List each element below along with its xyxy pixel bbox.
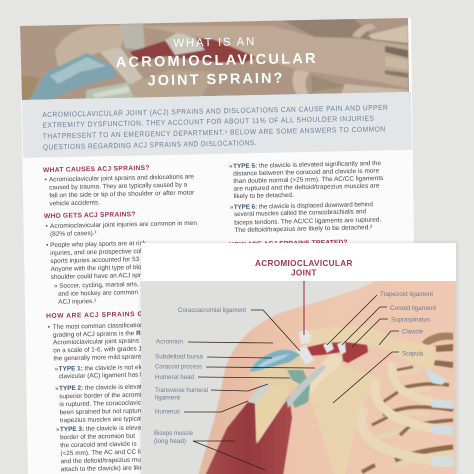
section: how graded: the generally more mild sprains	[53, 354, 142, 362]
left labels: Humeral head	[155, 374, 194, 381]
section: how graded: •	[48, 324, 50, 331]
header banner with anatomy image	[20, 18, 409, 100]
section: how graded: The most common classification	[53, 322, 144, 331]
type 6: The deltoid/trapezius are likely to be detached.²	[234, 224, 372, 234]
type 5: than double normal (>25 mm). The AC/CC ligaments	[233, 175, 383, 185]
left column text	[43, 164, 203, 474]
type 6	[230, 201, 382, 234]
bursa highlight	[258, 354, 290, 367]
cartilage	[425, 368, 447, 385]
coracoid process	[310, 354, 342, 394]
section: what causes: caused by trauma. They are typically caused by a	[49, 182, 188, 191]
right labels: Supraspinatus	[391, 316, 431, 324]
front sheet: anatomy diagram	[141, 243, 456, 474]
section: who gets: (82% of cases).¹	[50, 230, 97, 238]
type 5: distance between the coracoid and clavicle is more	[233, 168, 380, 178]
leader lines	[184, 295, 399, 470]
heading: how treated: HOW ARE ACJ SPRAINS TREATED?	[229, 239, 348, 249]
section: who gets: WHO GETS ACJ SPRAINS?	[44, 211, 136, 220]
section: how graded: Acromioclavicular joint sprains are	[53, 337, 151, 346]
section: what causes: •	[45, 176, 47, 184]
left labels: Coracoacromial ligament	[178, 307, 246, 314]
type 5: likely to be detached.	[234, 192, 294, 200]
title: WHAT IS AN	[173, 36, 256, 50]
section: what causes: Acromioclavicular joint sprains and dislocations are	[49, 173, 194, 183]
right labels: Clavicle	[402, 328, 423, 336]
type 5: »	[229, 163, 233, 170]
type 6: »	[230, 204, 234, 211]
section: who gets: •	[46, 223, 48, 230]
left labels: Transverse humeral	[155, 387, 209, 394]
scapula	[310, 362, 379, 474]
section: who gets: » Soccer, cycling, martial arts, skiing	[54, 281, 157, 290]
diagram heading: JOINT	[291, 268, 317, 278]
humerus	[255, 384, 290, 444]
title	[115, 35, 317, 90]
section: how graded: and the deltoid/trapezius muscles	[61, 456, 155, 465]
section: who gets: Acromioclavicular joint injuries are common in men	[50, 220, 197, 230]
type 5: are ruptured and the deltoid/trapezius muscles are	[233, 183, 380, 193]
subdeltoid bursa	[250, 350, 300, 372]
right labels	[380, 291, 436, 358]
section: how graded: attach to the clavicle) are likely	[61, 464, 149, 473]
section: how graded: clavicular (AC) ligament has been	[59, 371, 155, 380]
section: who gets	[44, 210, 199, 306]
left labels: Humerus	[155, 408, 181, 416]
section: how graded: »	[55, 385, 59, 392]
section: what causes	[43, 164, 195, 208]
left labels: Coracoid process	[155, 364, 203, 370]
skin silhouette	[198, 281, 456, 474]
section: how graded: border of the acromion but	[60, 433, 135, 441]
section: how graded: TYPE 1: the clavicle is not elevated	[59, 364, 160, 373]
right labels: Scapula	[402, 350, 423, 358]
section: who gets: Anyone with the right type of blow	[50, 264, 147, 273]
back ribs	[362, 367, 453, 472]
transverse humeral ligament	[248, 382, 270, 404]
biceps tendon bands	[278, 364, 326, 410]
left labels: Biceps muscle	[154, 430, 193, 437]
anatomy illustration	[141, 281, 456, 474]
section: who gets: and ice hockey are common	[58, 289, 139, 298]
section: what causes: WHAT CAUSES ACJ SPRAINS?	[43, 165, 150, 174]
biceps muscle	[205, 394, 292, 474]
section: how graded: is ruptured. The coracoclavicular	[59, 399, 153, 408]
section: how graded: »	[56, 426, 60, 433]
right labels: Conoid ligament	[390, 305, 436, 312]
sheet header	[141, 243, 456, 281]
section: who gets: shoulder could have an ACJ sprain	[51, 272, 150, 281]
section: what causes: vehicle accidents.	[49, 199, 100, 207]
intro panel	[22, 92, 412, 158]
section: how graded: HOW ARE ACJ SPRAINS GRADED?	[46, 310, 175, 320]
section: who gets: People who play sports are at risk	[50, 240, 147, 249]
section: how graded: TYPE 2: the clavicle is elevated	[59, 383, 149, 392]
section: who gets: ACJ injuries.¹	[58, 298, 96, 306]
type 6: several muscles called the coracobrachialis and	[234, 208, 367, 218]
diagram heading: ACROMIOCLAVICULAR	[255, 259, 353, 268]
section: who gets: injuries, and one prospective cohort	[50, 248, 151, 257]
intro text: ACROMIOCLAVICULAR JOINT (ACJ) SPRAINS AND DISLOCATIONS CAN CAUSE PAIN AND UPPER	[42, 103, 388, 119]
title: ACROMIOCLAVICULAR	[116, 51, 317, 71]
left labels: (long head)	[154, 438, 186, 445]
trapezoid and conoid ligaments	[296, 329, 346, 365]
illustration background	[141, 281, 198, 474]
type 5	[229, 160, 384, 200]
section: how graded: been sprained but not ruptured	[59, 407, 147, 416]
left labels	[154, 307, 246, 445]
back rib brown bands	[362, 367, 453, 472]
left labels: Subdeltoid bursa	[155, 354, 203, 360]
type 6: biceps tendons. The AC/CC ligaments are ruptured.	[234, 217, 381, 227]
intro text: EXTREMITY DYSFUNCTION. THEY ACCOUNT FOR ABOUT 11% OF ALL SHOULDER INJURIES	[42, 114, 375, 130]
section: how graded: trapezius muscles are typically	[60, 415, 147, 424]
back rib cream bodies	[372, 370, 453, 466]
red pointer	[304, 281, 305, 335]
section: how graded: »	[55, 366, 59, 373]
type 5: TYPE 5: the clavicle is elevated significantly and the	[233, 160, 382, 170]
clavicle	[296, 326, 436, 369]
front ribs	[361, 362, 453, 462]
front sheet shadow	[140, 242, 457, 474]
intro text: THATPRESENT TO AN EMERGENCY DEPARTMENT.¹ BELOW ARE SOME ANSWERS TO COMMON	[43, 124, 386, 141]
section: how graded: superior border of the acromion	[59, 391, 149, 400]
title: JOINT SPRAIN?	[147, 71, 284, 89]
humeral head	[249, 355, 306, 388]
section: how graded: TYPE 3: the clavicle is elevated	[60, 424, 150, 433]
supraspinatus muscle	[300, 342, 368, 363]
section: how graded: (<25 mm). The AC and CC ligaments	[60, 448, 165, 457]
section: how graded: the coracoid and clavicle is	[60, 441, 137, 449]
left labels: Acromion	[156, 338, 183, 346]
section: who gets: sports injuries accounted for 53	[50, 256, 140, 265]
section: what causes: fall on the side or tip of the shoulder or after motor	[49, 189, 195, 199]
diagram heading	[255, 259, 353, 278]
right labels: Trapezoid ligament	[380, 291, 433, 298]
tendon	[287, 370, 310, 408]
section: how graded: grading of ACJ sprains is the Rockwood	[53, 329, 169, 339]
section: how graded: on a scale of 1-6, with grades 1	[53, 346, 143, 354]
section: how graded	[46, 310, 178, 474]
left labels: ligament	[155, 394, 180, 402]
upper rib	[422, 332, 453, 347]
section: who gets: •	[46, 242, 48, 249]
clavicle rear rib ends	[433, 344, 453, 368]
type 6: TYPE 6: the clavicle is displaced downward behind	[234, 201, 373, 211]
intro text	[42, 103, 389, 152]
intro text: QUESTIONS REGARDING ACJ SPRAINS AND DISLOCATIONS.	[43, 138, 257, 152]
right column text	[227, 160, 385, 249]
